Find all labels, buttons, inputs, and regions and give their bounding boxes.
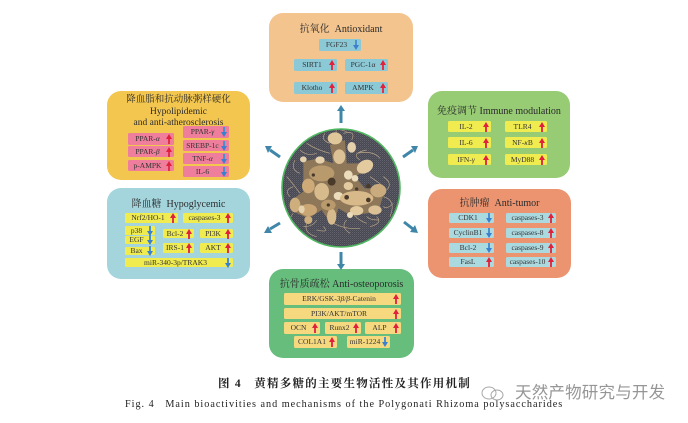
panel: anti-tumor — [428, 189, 571, 278]
chip: p-AMPK up: p-AMPK — [134, 161, 161, 170]
chip: Bcl-2 down: Bcl-2 — [460, 243, 476, 252]
heading: hypolipidemic: and anti-atherosclerosis — [134, 118, 223, 128]
chip: AKT up — [200, 243, 233, 253]
panel: hypoglycemic — [107, 188, 250, 279]
chip: caspases-3 up — [183, 213, 233, 223]
chip: CDK1 down: CDK1 — [458, 213, 478, 222]
chip: IRS-1 up — [163, 243, 194, 253]
chip: TLR4 up — [505, 121, 547, 132]
chip: OCN up: OCN — [291, 323, 306, 332]
chip: Runx2 up: Runx2 — [329, 323, 350, 332]
chip: SIRT1 up: SIRT1 — [302, 60, 322, 69]
chip: Bcl-2 up — [163, 229, 194, 238]
chip: ERK/GSK-3β/β-Catenin up — [284, 293, 401, 305]
chip: IFN-γ up — [448, 154, 491, 165]
heading: hypolipidemic: 降血脂和抗动脉粥样硬化 — [126, 95, 231, 105]
chip: caspases-8 up — [506, 228, 556, 238]
chip: caspases-9 up — [506, 243, 556, 253]
chip: Bax down: Bax — [130, 246, 143, 255]
heading: antioxidant: 抗氧化 Antioxidant — [300, 24, 382, 35]
chip: PPAR-α up — [128, 133, 174, 145]
chip: CyclinB1 down: CyclinB1 — [454, 228, 482, 237]
chip: COL1A1 up: COL1A1 — [298, 337, 326, 346]
arrow: lower right — [404, 222, 418, 233]
chip: SREBP-1c down — [183, 140, 229, 151]
chip: NF-κB up: NF-κB — [512, 138, 533, 147]
chip: IL-6 up: IL-6 — [459, 138, 473, 147]
chip: CDK1 down — [449, 213, 494, 223]
chip: miR-340-3p/TRAK3 down — [125, 258, 233, 267]
chip: caspases-3 up: caspases-3 — [511, 213, 544, 222]
arrow: upper right — [403, 146, 418, 157]
chip: Klotho up: Klotho — [302, 83, 322, 92]
chip: COL1A1 up — [294, 336, 337, 348]
heading: immune modulation: 免疫调节 Immune modulation — [437, 106, 561, 117]
arrow: lower left — [264, 223, 280, 233]
arrow: up — [337, 105, 345, 123]
chip: FasL up: FasL — [460, 257, 476, 266]
chip: NF-κB up — [505, 137, 547, 148]
chip: FGF23 down: FGF23 — [326, 40, 347, 49]
chip: FasL up — [449, 257, 494, 267]
chip: PPAR-α up: PPAR-α — [135, 134, 160, 143]
heading: hypolipidemic: Hypolipidemic — [150, 106, 207, 116]
chip: PPAR-γ down: PPAR-γ — [191, 127, 214, 136]
chip: Runx2 up — [325, 322, 361, 334]
chip: SREBP-1c down: SREBP-1c — [186, 141, 219, 150]
chip: caspases-9 up: caspases-9 — [511, 243, 544, 252]
chip: PPAR-β up — [128, 146, 174, 157]
panel: immune modulation — [428, 91, 570, 178]
chip: Klotho up — [294, 82, 337, 94]
chip: miR-1224 down — [347, 336, 390, 348]
chip: EGF down — [125, 236, 155, 244]
panel: hypolipidemic — [107, 91, 250, 180]
chip: AKT up: AKT — [205, 243, 221, 252]
chip: ALP up: ALP — [372, 323, 387, 332]
chip: MyD88 up — [505, 154, 547, 165]
chip: IFN-γ up: IFN-γ — [457, 155, 475, 164]
chip: PPAR-γ down — [183, 126, 229, 138]
chip: IL-2 up: IL-2 — [459, 122, 473, 131]
icon: wechat — [482, 386, 504, 400]
chip: caspases-10 up: caspases-10 — [510, 257, 545, 266]
chip: IL-6 up — [448, 137, 491, 148]
arrow: down — [337, 252, 345, 270]
chip: TLR4 up: TLR4 — [514, 122, 531, 131]
chip: caspases-8 up: caspases-8 — [511, 228, 544, 237]
chip: Bax down — [125, 247, 155, 255]
chip: caspases-10 up — [506, 257, 556, 267]
chip: TNF-α down: TNF-α — [192, 154, 213, 163]
chip: TNF-α down — [183, 153, 229, 164]
heading: anti-tumor: 抗肿瘤 Anti-tumor — [460, 198, 540, 209]
chip: caspases-3 up — [506, 213, 556, 223]
chip: CyclinB1 down — [449, 228, 494, 238]
chip: ALP up — [365, 322, 401, 334]
photo: Polygonati Rhizoma — [282, 129, 400, 247]
chip: Nrf2/HO-1 up: Nrf2/HO-1 — [131, 213, 165, 222]
panel: antioxidant — [269, 13, 413, 102]
central photo and arrows — [264, 105, 418, 270]
chip: PGC-1α up: PGC-1α — [351, 60, 375, 69]
chip: IRS-1 up: IRS-1 — [166, 243, 184, 252]
chip: PGC-1α up — [345, 59, 388, 71]
arrow: upper left — [265, 146, 280, 157]
chip: IL-6 down — [183, 166, 229, 177]
watermark: 天然产物研究与开发 — [515, 384, 665, 402]
chip: AMPK up: AMPK — [352, 83, 374, 92]
chip: FGF23 down — [319, 39, 361, 51]
chip: PI3K up: PI3K — [205, 229, 221, 238]
chip: PI3K/AKT/mTOR up — [284, 308, 401, 319]
heading: anti-osteoporosis: 抗骨质疏松 Anti-osteoporosis — [280, 279, 403, 290]
chip: MyD88 up: MyD88 — [511, 155, 534, 164]
caption: Chinese: 图 4 黄精多糖的主要生物活性及其作用机制 — [218, 378, 471, 390]
chip: PPAR-β up: PPAR-β — [135, 147, 160, 156]
chip: Nrf2/HO-1 up — [125, 213, 178, 223]
heading: hypolipidemic — [126, 94, 231, 128]
chip: Bcl-2 down — [449, 243, 494, 253]
chip: EGF down: EGF — [129, 235, 144, 244]
chip: caspases-3 up: caspases-3 — [188, 213, 221, 222]
chip: p38 down — [125, 226, 155, 235]
chip: miR-1224 down: miR-1224 — [350, 337, 380, 346]
chip: p-AMPK up — [128, 160, 174, 171]
chip: PI3K/AKT/mTOR up: PI3K/AKT/mTOR — [311, 309, 367, 318]
chip: AMPK up — [345, 82, 388, 94]
chip: OCN up — [284, 322, 320, 334]
chip: PI3K up — [200, 229, 233, 238]
heading: hypoglycemic: 降血糖 Hypoglycemic — [132, 199, 225, 210]
chip: SIRT1 up — [294, 59, 337, 71]
chip: ERK/GSK-3β/β-Catenin up: ERK/GSK-3β/β-Catenin — [302, 294, 376, 303]
caption: English: Fig. 4 Main bioactivities and mechanisms of the Polygonati Rhizoma polysaccharides — [125, 399, 563, 410]
chip: miR-340-3p/TRAK3 down: miR-340-3p/TRAK3 — [144, 258, 207, 267]
chip: IL-2 up — [448, 121, 491, 132]
chip: IL-6 down: IL-6 — [196, 167, 209, 176]
chip: p38 down: p38 — [131, 226, 142, 235]
chip: Bcl-2 up: Bcl-2 — [167, 229, 183, 238]
panel: anti-osteoporosis — [269, 269, 414, 358]
